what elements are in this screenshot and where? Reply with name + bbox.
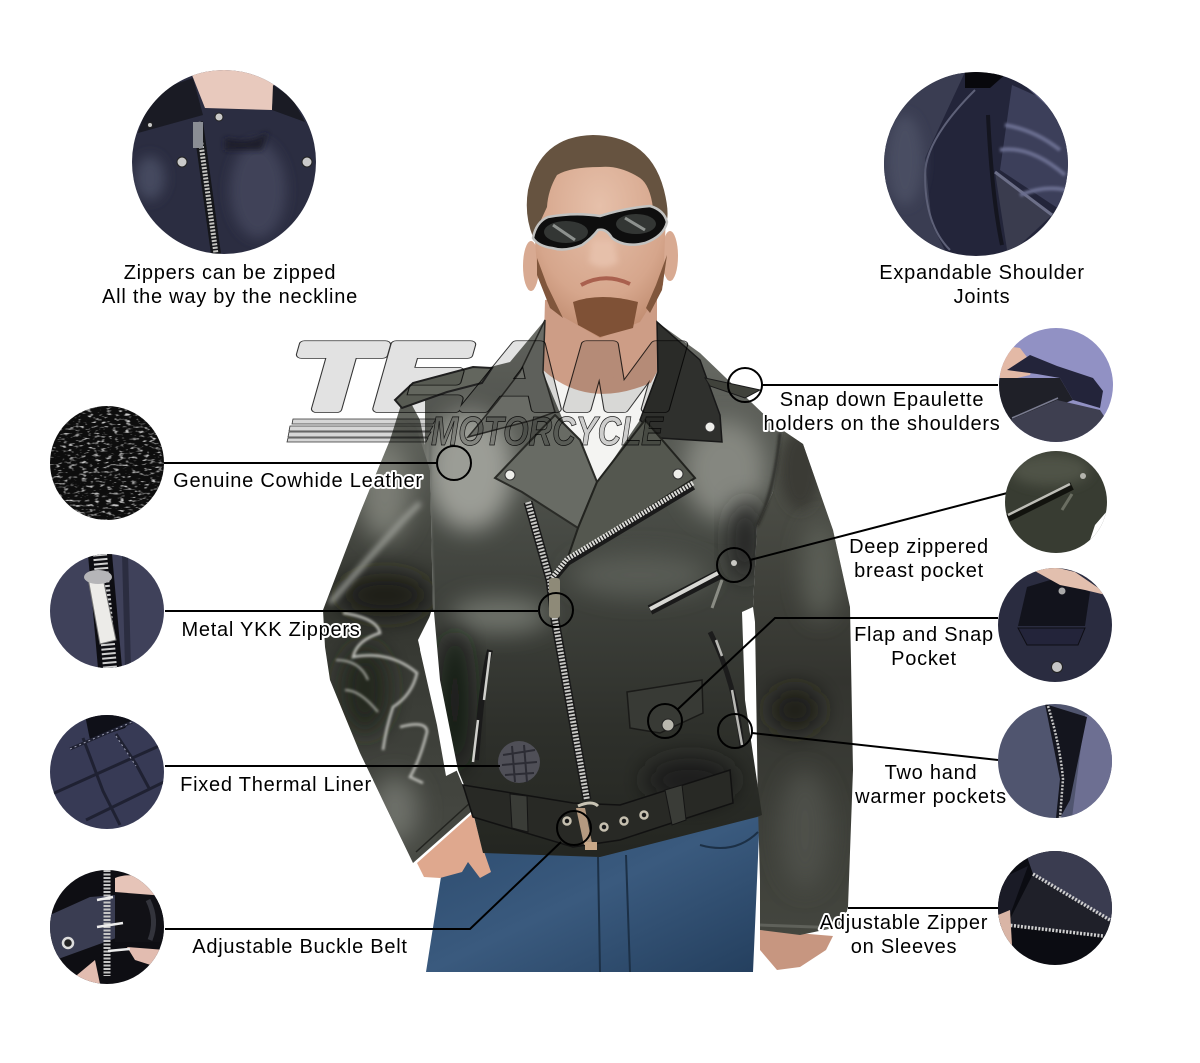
belt loops	[510, 785, 686, 832]
left hand	[417, 813, 491, 878]
ears	[523, 231, 678, 291]
left epaulette	[395, 367, 492, 408]
main zipper	[528, 502, 587, 800]
detail photo: shoulder joints	[884, 72, 1068, 256]
jeans seams	[598, 832, 758, 972]
logo speed stripes	[287, 419, 436, 442]
lapel snaps	[505, 422, 715, 480]
right hand	[760, 930, 833, 970]
neck	[543, 290, 657, 402]
belt	[463, 770, 733, 847]
person wearing leather jacket	[320, 135, 860, 972]
breast pocket	[650, 560, 737, 610]
label: flap pocket: Pocket	[891, 648, 957, 670]
detail photo: breast pocket	[1005, 451, 1108, 553]
detail photo: quilted liner	[50, 715, 164, 829]
flap snap	[662, 719, 674, 731]
logo word TEAM: TEAM	[292, 324, 682, 429]
detail photo: flap pocket	[998, 566, 1112, 682]
mouth	[581, 278, 630, 285]
label: hand warmer pockets: Two hand	[885, 762, 977, 784]
label: epaulette: Snap down Epaulette	[780, 389, 984, 411]
thermal liner patch	[498, 741, 540, 783]
jeans	[426, 812, 760, 972]
label: hand warmer pockets: warmer pockets	[854, 786, 1007, 808]
jacket body	[425, 315, 790, 865]
right sleeve	[753, 431, 853, 935]
label: breast pocket: Deep zippered	[849, 536, 989, 558]
right collar	[640, 322, 722, 442]
label: YKK zippers: Metal YKK Zippers	[181, 619, 361, 641]
left lapel	[495, 415, 597, 528]
detail photo: buckle belt	[50, 870, 165, 984]
callout lines and markers	[164, 368, 1015, 929]
detail photo: neckline zipper	[132, 70, 316, 254]
nose	[589, 240, 618, 267]
label: neckline zippers: All the way by the neckline	[102, 286, 358, 308]
detail photo: hand warmer pockets	[998, 704, 1112, 818]
label: sleeve zipper: Adjustable Zipper	[820, 912, 988, 934]
logo: Team Motorcycle	[287, 324, 682, 454]
white gap left of body	[420, 612, 458, 776]
logo word TEAM: TEAM	[292, 324, 682, 429]
left collar	[468, 320, 555, 437]
left hand pocket	[473, 650, 490, 762]
logo word MOTORCYCLE: MOTORCYCLE	[431, 408, 664, 454]
label: thermal liner: Fixed Thermal Liner	[180, 774, 372, 796]
right hand pocket	[710, 632, 742, 746]
label: buckle belt: Adjustable Buckle Belt	[192, 936, 408, 958]
flap pocket	[627, 680, 703, 733]
face	[533, 150, 666, 338]
detail photo: epaulette	[999, 328, 1113, 442]
label: shoulder joints: Joints	[954, 286, 1010, 308]
detail photo: YKK zipper	[50, 554, 164, 668]
detail photo: leather grain	[50, 406, 164, 520]
sideburns	[537, 255, 667, 318]
label: shoulder joints: Expandable Shoulder	[879, 262, 1085, 284]
label: epaulette: holders on the shoulders	[763, 413, 1001, 435]
diagonal zipper	[552, 483, 693, 580]
white t-shirt	[543, 370, 657, 482]
belt eyelets	[564, 812, 648, 830]
left sleeve	[323, 406, 471, 863]
label: flap pocket: Flap and Snap	[854, 624, 994, 646]
label: breast pocket: breast pocket	[854, 560, 984, 582]
logo word TEAM	[292, 324, 682, 429]
label: sleeve zipper: on Sleeves	[851, 936, 957, 958]
sunglasses	[533, 206, 667, 249]
goatee	[573, 297, 638, 337]
shoulder seam right	[757, 433, 780, 526]
right lapel	[567, 420, 695, 560]
detail photo: sleeve zipper	[998, 851, 1112, 965]
zipper pull	[549, 578, 560, 618]
right epaulette	[705, 378, 760, 398]
hair	[527, 135, 668, 237]
belt buckle	[576, 803, 598, 850]
label: cowhide leather: Genuine Cowhide Leather	[173, 470, 423, 492]
label: neckline zippers: Zippers can be zipped	[124, 262, 336, 284]
